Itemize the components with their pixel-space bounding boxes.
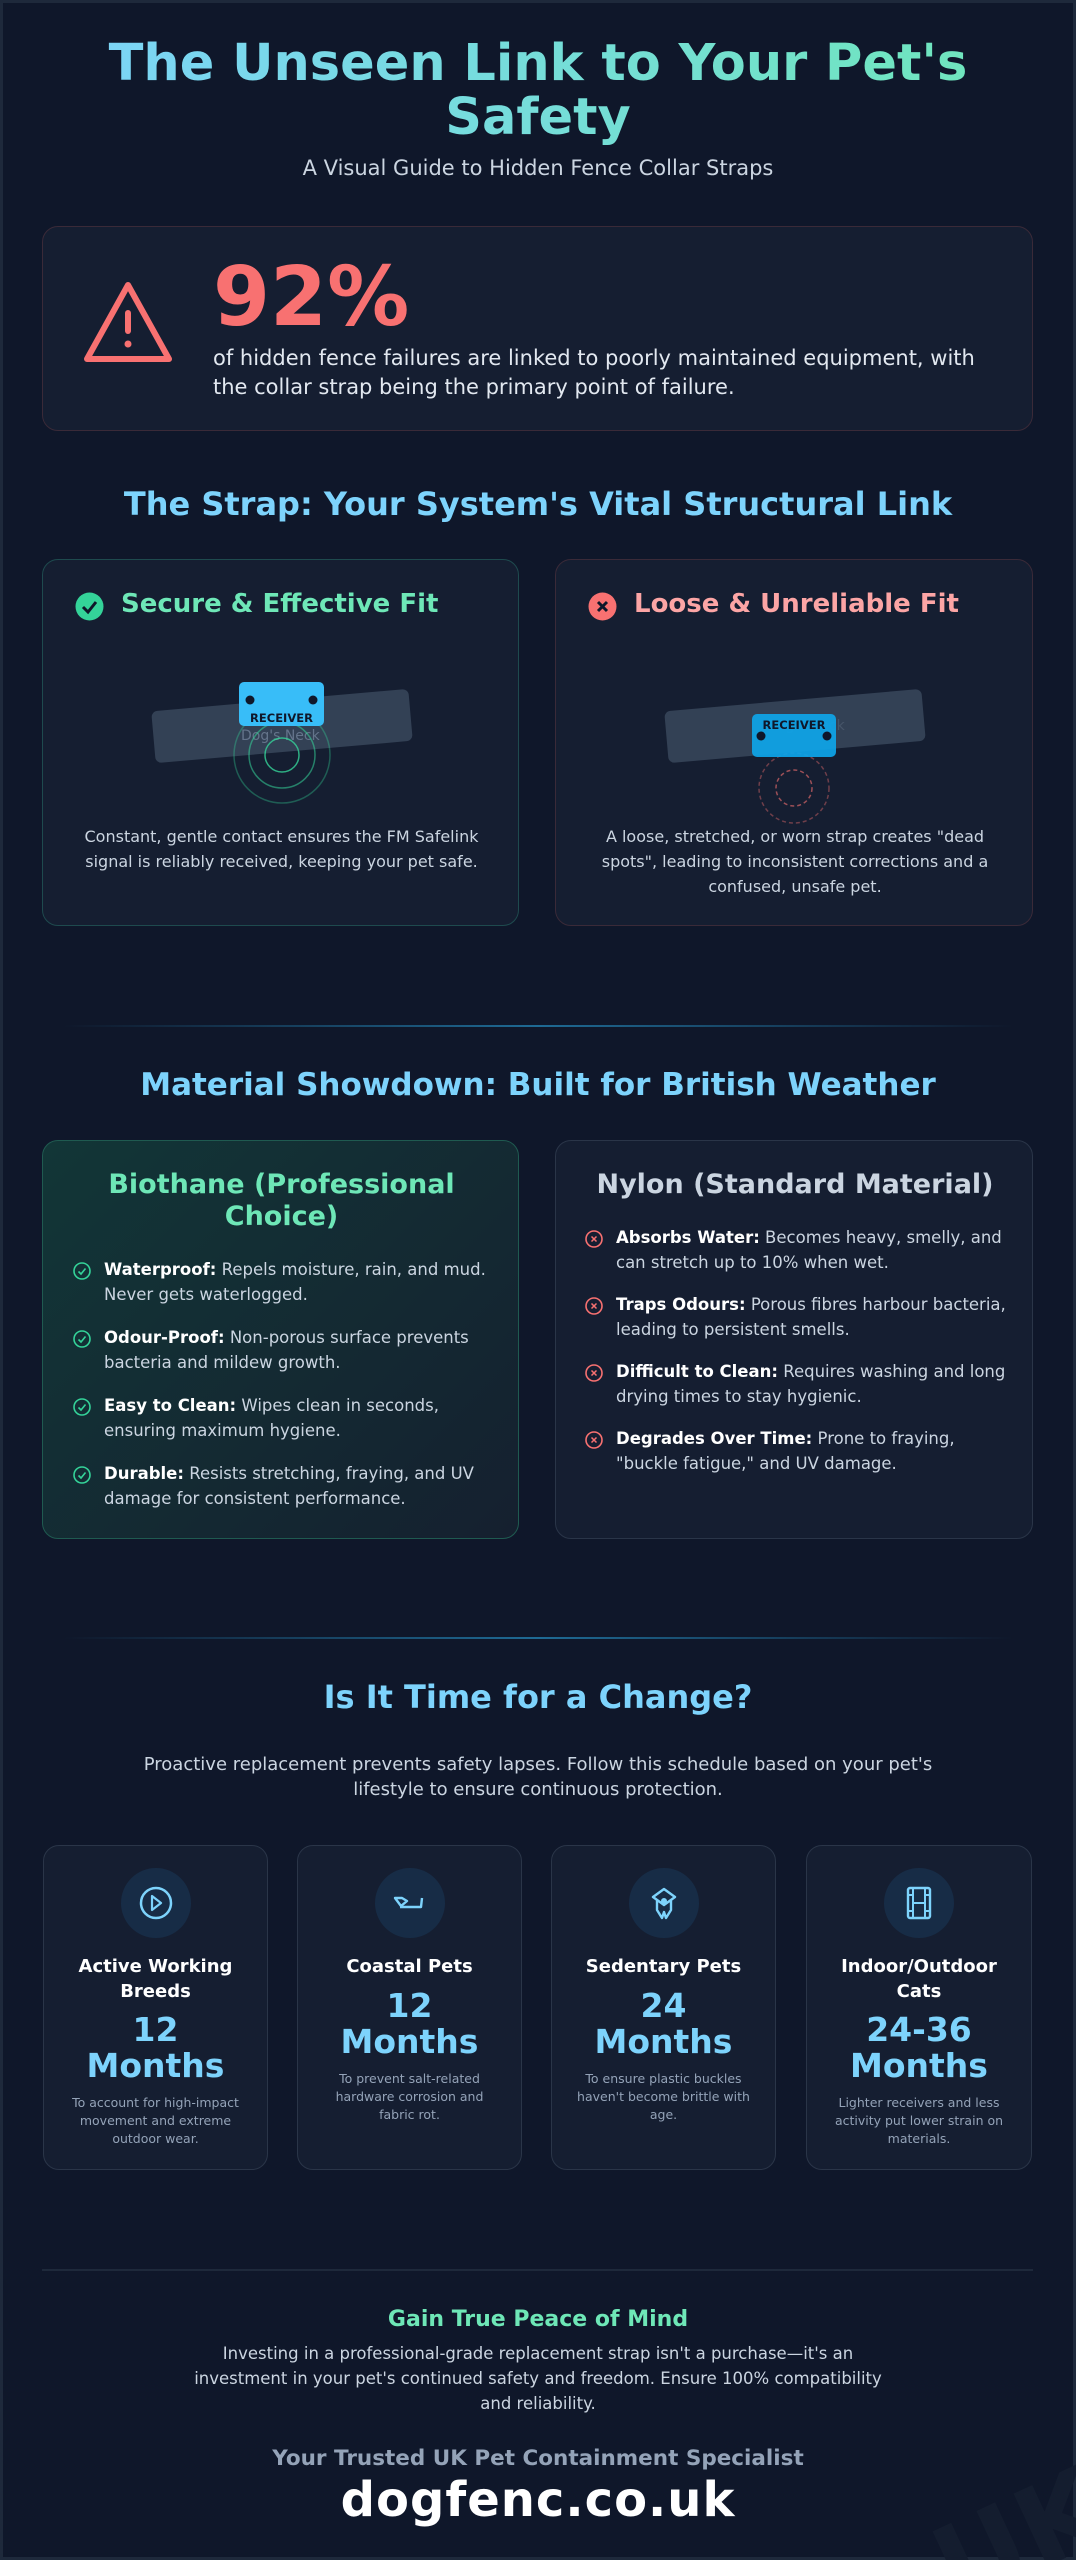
card: indoor outdoor cats: Cats xyxy=(897,1981,941,2002)
card: active working breeds: Active Working xyxy=(79,1956,232,1977)
card heading: Secure & Effective Fit xyxy=(121,589,438,619)
subtitle: A Visual Guide to Hidden Fence Collar Straps xyxy=(303,156,773,180)
card heading: Biothane (Professional xyxy=(108,1169,455,1200)
closing text: Investing in a professional-grade replacement strap isn't a purchase—it's an investment in your pet's continued safety and freedom. Ensure 100% compatibility and reliability. xyxy=(194,2344,882,2413)
heading: strap section: The Strap: Your System's Vital Structural Link xyxy=(124,485,952,523)
list: biothane benefits: Odour-Proof: Non-porous surface prevents bacteria and mildew growth. xyxy=(104,1328,469,1372)
card: indoor outdoor cats: Months xyxy=(850,2046,988,2085)
card heading: Choice) xyxy=(225,1201,338,1232)
diagram: tight strap xyxy=(152,682,412,804)
list: nylon drawbacks: Absorbs Water: Becomes heavy, smelly, and can stretch up to 10% when wet. xyxy=(616,1228,1002,1272)
diagram: loose strap: Dog's Neck xyxy=(766,718,846,734)
list: nylon drawbacks: Difficult to Clean: Requires washing and long drying times to stay hygienic. xyxy=(616,1362,1005,1406)
card: sedentary pets: 24 xyxy=(641,1986,686,2025)
tagline: Your Trusted UK Pet Containment Specialist xyxy=(272,2446,804,2471)
list: nylon drawbacks: Degrades Over Time: Prone to fraying, "buckle fatigue," and UV damage. xyxy=(616,1429,955,1473)
title xyxy=(3,37,1073,145)
description: Constant, gentle contact ensures the FM Safelink signal is reliably received, keeping your pet safe. xyxy=(84,827,478,871)
card: coastal pets: Coastal Pets xyxy=(346,1956,473,1977)
list: biothane benefits xyxy=(73,1260,486,1508)
card: active working breeds: To account for high-impact movement and extreme outdoor wear. xyxy=(72,2095,239,2146)
card: sedentary pets xyxy=(551,1845,776,2170)
icon: film xyxy=(884,1868,954,1938)
card: active working breeds xyxy=(43,1845,268,2170)
card: indoor outdoor cats: Lighter receivers and less activity put lower strain on materials. xyxy=(835,2095,1003,2146)
list: nylon drawbacks xyxy=(585,1228,1006,1473)
icon: check xyxy=(76,592,104,620)
card: sedentary pets: Sedentary Pets xyxy=(586,1956,741,1977)
card: sedentary pets: Months xyxy=(595,2022,732,2061)
icon: cross xyxy=(588,592,616,620)
card: coastal pets: To prevent salt-related hardware corrosion and fabric rot. xyxy=(336,2071,483,2122)
heading: time for a change: Is It Time for a Change? xyxy=(324,1678,752,1716)
icon: cap xyxy=(629,1868,699,1938)
card: active working breeds: Breeds xyxy=(120,1981,191,2002)
panel: nylon xyxy=(555,1140,1033,1539)
icon: tide xyxy=(375,1868,445,1938)
intro text: Proactive replacement prevents safety lapses. Follow this schedule based on your pet's lifestyle to ensure continuous protection. xyxy=(144,1754,932,1800)
card: indoor outdoor cats: Indoor/Outdoor xyxy=(841,1956,997,1977)
diagram: loose strap xyxy=(664,690,926,824)
heading: peace of mind: Gain True Peace of Mind xyxy=(388,2307,688,2332)
card: coastal pets: Months xyxy=(341,2022,478,2061)
list: biothane benefits: Durable: Resists stretching, fraying, and UV damage for consistent performance. xyxy=(104,1464,474,1508)
card heading: Loose & Unreliable Fit xyxy=(634,589,959,619)
card: coastal pets: 12 xyxy=(387,1986,432,2025)
icon: warning triangle xyxy=(84,282,172,362)
card heading xyxy=(108,1169,455,1232)
title: Safety xyxy=(445,88,631,147)
list: nylon drawbacks: Traps Odours: Porous fibres harbour bacteria, leading to persistent smells. xyxy=(616,1295,1006,1339)
card: coastal pets xyxy=(297,1845,522,2170)
diagram: tight strap: RECEIVER xyxy=(250,711,313,725)
title: The Unseen Link to Your Pet's xyxy=(109,34,967,93)
card heading: Nylon (Standard Material) xyxy=(596,1169,994,1200)
card: active working breeds: 12 xyxy=(133,2010,178,2049)
diagram: loose strap: RECEIVER xyxy=(763,718,826,732)
panel: secure fit xyxy=(42,559,519,926)
panel: loose fit xyxy=(555,559,1033,926)
stat number: 92% xyxy=(213,250,409,345)
heading: material showdown: Material Showdown: Built for British Weather xyxy=(140,1067,936,1103)
description: A loose, stretched, or worn strap creates "dead spots", leading to inconsistent corrections and a confused, unsafe pet. xyxy=(602,827,988,896)
card: indoor outdoor cats xyxy=(806,1845,1032,2170)
card: indoor outdoor cats: 24-36 xyxy=(866,2010,972,2049)
brand url: dogfenc.co.uk xyxy=(341,2472,735,2528)
card: sedentary pets: To ensure plastic buckles haven't become brittle with age. xyxy=(577,2071,750,2122)
panel: biothane xyxy=(42,1140,519,1539)
icon: play xyxy=(121,1868,191,1938)
diagram: tight strap: Dog's Neck xyxy=(241,728,321,744)
panel: 92% stat xyxy=(42,226,1033,431)
list: biothane benefits: Waterproof: Repels moisture, rain, and mud. Never gets waterlogged. xyxy=(104,1260,486,1304)
card: active working breeds: Months xyxy=(87,2046,224,2085)
stat text: of hidden fence failures are linked to poorly maintained equipment, with the collar strap being the primary point of failure. xyxy=(213,346,975,399)
list: biothane benefits: Easy to Clean: Wipes clean in seconds, ensuring maximum hygiene. xyxy=(104,1396,439,1440)
